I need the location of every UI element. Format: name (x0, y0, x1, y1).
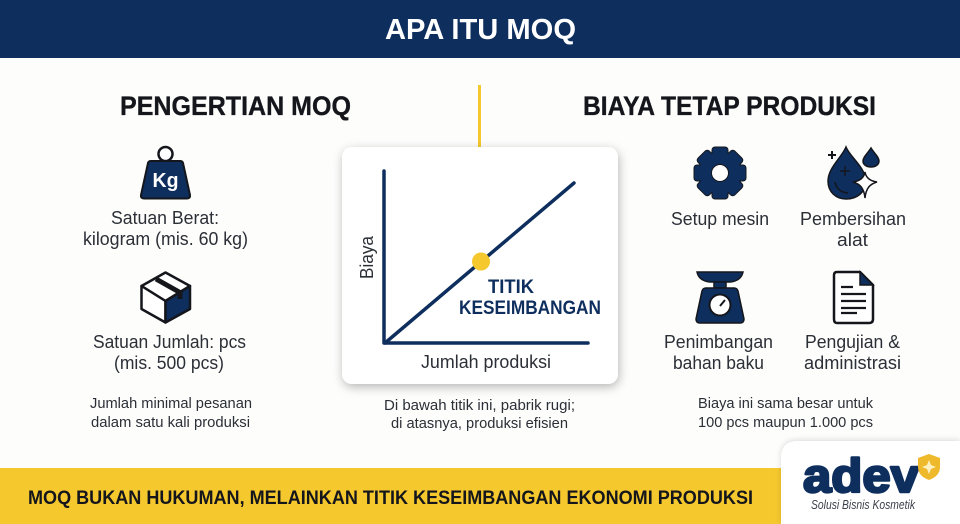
text: satuan jumlah: (mis. 500 pcs) (114, 353, 224, 373)
logo tagline: Solusi Bisnis Kosmetik (811, 498, 916, 512)
text: satuan jumlah: Satuan Jumlah: pcs (93, 332, 246, 352)
heading: Pengertian MOQ: PENGERTIAN MOQ (120, 91, 351, 121)
text: pembersihan alat: alat (837, 230, 868, 250)
y axis label: Biaya (357, 235, 377, 279)
icon: gear (694, 147, 746, 199)
heading: Biaya Tetap Produksi: BIAYA TETAP PRODUKSI (583, 91, 876, 121)
icon: weight Kg: Kg (152, 170, 178, 192)
logo wordmark: adev (803, 449, 919, 502)
text: penimbangan: Penimbangan (664, 332, 773, 352)
chart caption: Di bawah titik ini, pabrik rugi; (384, 397, 575, 414)
text: pengujian (804, 332, 901, 373)
icon: water drop (828, 147, 879, 199)
label: titik keseimbangan: TITIK (488, 277, 534, 298)
chart axes (384, 171, 588, 343)
title: APA ITU MOQ (385, 14, 576, 46)
chart caption (384, 397, 575, 432)
text: definisi MOQ: Jumlah minimal pesanan (90, 395, 252, 412)
text: pengujian: administrasi (804, 353, 901, 373)
text: penimbangan (664, 332, 773, 373)
text: catatan biaya: 100 pcs maupun 1.000 pcs (698, 414, 873, 431)
label: titik keseimbangan (459, 277, 601, 319)
text: satuan jumlah (93, 332, 246, 373)
chart caption: di atasnya, produksi efisien (391, 415, 568, 432)
panel: break-even chart (342, 147, 618, 384)
icon: scale (696, 272, 744, 323)
break-even point (472, 252, 490, 270)
panel: pengertian (83, 147, 252, 431)
text: catatan biaya (698, 395, 873, 431)
chart line (385, 183, 574, 343)
text: pembersihan alat: Pembersihan (800, 209, 906, 229)
text: penimbangan: bahan baku (673, 353, 764, 373)
logo card (781, 441, 960, 524)
text: satuan berat: kilogram (mis. 60 kg) (83, 229, 248, 249)
text: catatan biaya: Biaya ini sama besar untuk (698, 395, 873, 412)
icon: weight Kg (141, 147, 190, 198)
text: pembersihan alat (800, 209, 906, 250)
text: definisi MOQ: dalam satu kali produksi (91, 414, 250, 431)
text: pengujian: Pengujian & (805, 332, 900, 352)
icon: shield (918, 454, 940, 480)
text: definisi MOQ (90, 395, 252, 431)
header banner (0, 0, 960, 58)
text: satuan berat: Satuan Berat: (111, 208, 219, 228)
icon: box (142, 272, 190, 322)
icon: document (834, 272, 873, 323)
footer text: MOQ BUKAN HUKUMAN, MELAINKAN TITIK KESEIMBANGAN EKONOMI PRODUKSI (28, 488, 753, 509)
text: setup mesin: Setup mesin (671, 209, 769, 229)
panel: biaya tetap (664, 147, 906, 431)
footer banner (0, 468, 790, 524)
text: satuan berat (83, 208, 248, 249)
x axis label: Jumlah produksi (421, 352, 551, 372)
label: titik keseimbangan: KESEIMBANGAN (459, 298, 601, 319)
